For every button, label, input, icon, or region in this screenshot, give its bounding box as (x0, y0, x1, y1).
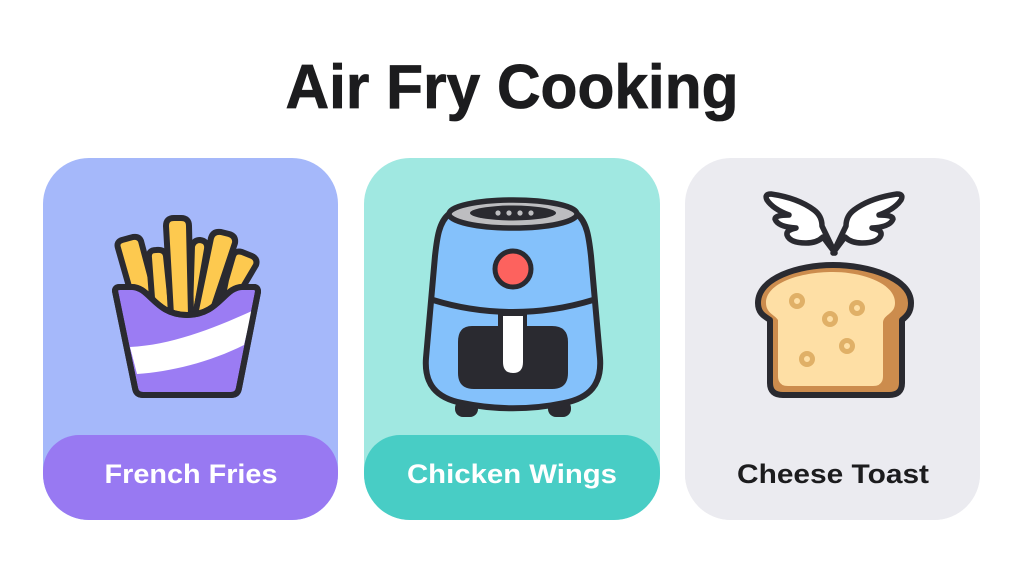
panel: French Fries (43, 158, 338, 520)
label band (43, 435, 338, 520)
icon: air fryer (426, 200, 600, 417)
icon: french fries (115, 218, 258, 395)
panel: Cheese Toast (685, 158, 980, 520)
label band (364, 435, 660, 520)
title: Air Fry Cooking (286, 53, 738, 122)
label: Chicken Wings (407, 459, 617, 489)
label: French Fries (104, 459, 278, 489)
label: Cheese Toast (737, 459, 929, 489)
card background (43, 158, 338, 520)
card background (685, 158, 980, 520)
label band (685, 435, 980, 520)
panel: Chicken Wings (364, 158, 660, 520)
icon: toast (758, 265, 911, 395)
card background (364, 158, 660, 520)
icon: wings (766, 194, 902, 253)
